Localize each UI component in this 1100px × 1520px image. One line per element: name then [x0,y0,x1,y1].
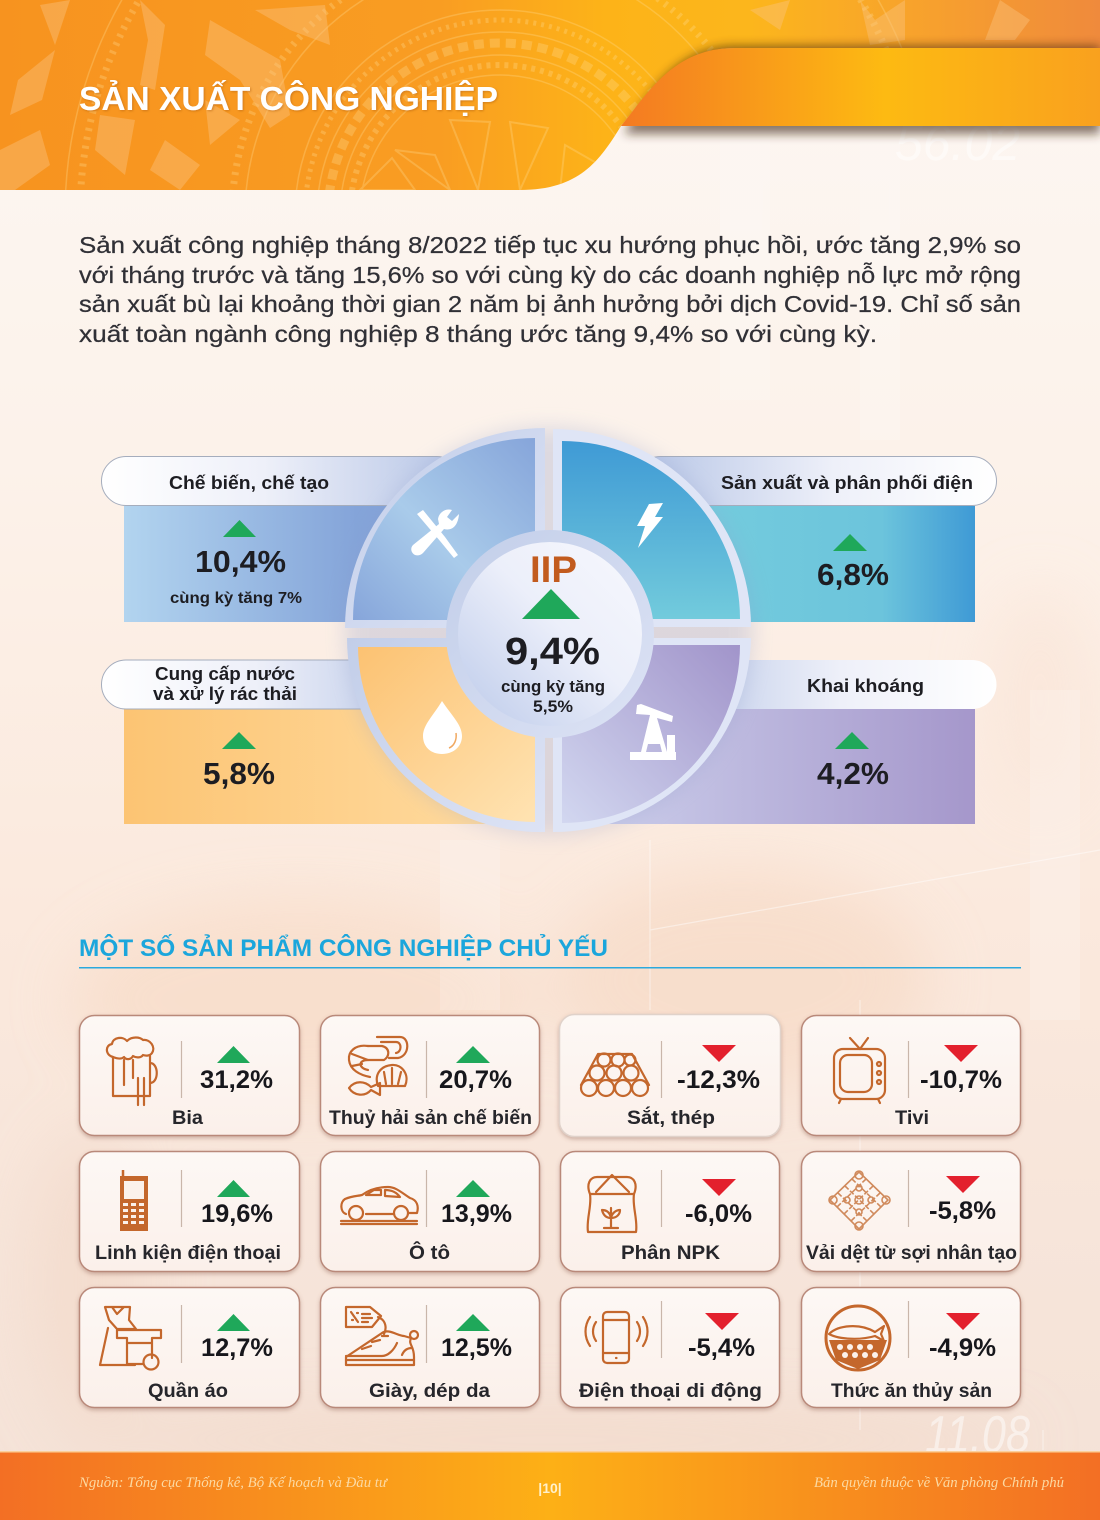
panel: Cung cấp nước và xử lý rác thải: 5,8% [203,756,275,791]
panel: Chế biến, chế tạo: 10,4% [195,544,286,579]
card: Tivi: -10,7% [920,1066,1002,1094]
panel: Chế biến, chế tạo: cùng kỳ tăng 7% [170,590,302,607]
icon: water drop [423,701,462,754]
panel: Cung cấp nước và xử lý rác thải: và xử lý rác thải [153,683,297,704]
icon: clothes [100,1307,161,1370]
card: Phân NPK: -6,0% [685,1200,752,1228]
icon: vibrating smartphone [586,1312,648,1363]
card: Điện thoại di động: Điện thoại di động [579,1380,762,1402]
card: Điện thoại di động [560,1288,780,1408]
center circle: 9,4% [505,631,600,673]
icon: woven fabric [829,1171,890,1230]
icon: steel pipes [581,1054,649,1096]
card: Ô tô: Ô tô [409,1240,450,1264]
card: Sắt, thép [560,1014,780,1136]
card: Giày, dép da: 12,5% [441,1334,512,1362]
page background: 11.08 [925,1406,1030,1464]
icon: fish feed [826,1306,890,1370]
quadrant: bottom left [347,638,545,832]
intro paragraph: sản xuất bù lại khoảng thời gian 2 năm bị ảnh hưởng bởi dịch Covid-19. Chỉ số sản [79,291,1021,317]
panel: Sản xuất và phân phối điện: 6,8% [817,557,889,592]
card: Phân NPK: Phân NPK [621,1242,720,1264]
footer source: Nguồn: Tổng cục Thống kê, Bộ Kế hoạch và Đầu tư [78,1475,389,1491]
card: Vải dệt từ sợi nhân tạo [802,1152,1020,1272]
center circle [446,530,654,738]
quadrant: top left [345,428,545,628]
header drum pattern [65,0,902,190]
icon: television [834,1038,885,1103]
card: Quần áo: Quần áo [148,1380,228,1402]
card: Thức ăn thủy sản [802,1288,1020,1408]
intro paragraph: Sản xuất công nghiệp tháng 8/2022 tiếp tục xu hướng phục hồi, ước tăng 2,9% so [79,232,1021,258]
intro paragraph: với tháng trước và tăng 15,6% so với cùng kỳ do các doanh nghiệp nỗ lực mở rộng [79,262,1021,288]
panel: Chế biến, chế tạo: Chế biến, chế tạo [169,472,329,493]
center circle: cùng kỳ tăng [501,678,605,696]
quadrant: bottom right [553,638,751,832]
card: Vải dệt từ sợi nhân tạo: -5,8% [929,1197,996,1225]
icon: lightning bolt [637,503,663,548]
panel: Chế biến, chế tạo [102,456,500,622]
card: Ô tô: 13,9% [441,1200,512,1228]
icon: car [341,1187,418,1224]
card: Bia [80,1016,300,1136]
header ribbon [621,48,1100,126]
ribbon shadow [625,46,1100,134]
card: Quần áo: 12,7% [201,1334,273,1362]
panel: Khai khoáng: Khai khoáng [807,675,924,696]
card: Sắt, thép: Sắt, thép [627,1105,715,1129]
header bird motifs [0,0,1030,190]
center circle: IIP [530,549,577,590]
card: Bia: Bia [172,1107,203,1129]
icon: beer [107,1038,157,1105]
panel: Khai khoáng: 4,2% [817,756,889,791]
section heading: MỘT SỐ SẢN PHẨM CÔNG NGHIỆP CHỦ YẾU [79,933,608,962]
footer copyright: Bản quyền thuộc về Văn phòng Chính phủ [814,1475,1064,1491]
panel: Sản xuất và phân phối điện: Sản xuất và phân phối điện [721,472,973,493]
IIP diagram [102,427,996,835]
header band [0,0,1100,190]
panel: Khai khoáng [580,660,996,824]
panel: Cung cấp nước và xử lý rác thải [102,660,524,824]
card: Quần áo [80,1288,300,1408]
icon: keypad phone [120,1170,148,1231]
panel: Sản xuất và phân phối điện [600,456,996,622]
card: Giày, dép da [320,1288,540,1408]
icon: oil pump [630,704,676,760]
card: Thức ăn thủy sản: -4,9% [929,1334,996,1362]
card: Thuỷ hải sản chế biến: Thuỷ hải sản chế biến [329,1107,532,1129]
quadrant: top right [553,429,751,627]
page background: 56.02 [895,115,1020,171]
card: Linh kiện điện thoại [80,1152,300,1272]
card: Tivi: Tivi [895,1107,929,1129]
card: Giày, dép da: Giày, dép da [369,1380,490,1402]
card: Linh kiện điện thoại: 19,6% [201,1200,273,1228]
card: Thức ăn thủy sản: Thức ăn thủy sản [831,1380,992,1402]
icon: fertilizer bag [588,1175,636,1232]
card: Linh kiện điện thoại: Linh kiện điện thoại [95,1242,281,1264]
page number: |10| [538,1480,562,1496]
icon: shoe with tag [346,1307,418,1365]
card: Ô tô [320,1152,540,1272]
icon: seafood [349,1037,407,1095]
card: Sắt, thép: -12,3% [677,1066,760,1094]
card: Vải dệt từ sợi nhân tạo: Vải dệt từ sợi nhân tạo [806,1242,1017,1264]
intro paragraph [79,232,1021,347]
card: Phân NPK [560,1152,780,1272]
footer [0,1451,1100,1520]
card: Thuỷ hải sản chế biến: 20,7% [439,1066,512,1094]
card: Tivi [802,1016,1020,1136]
card: Bia: 31,2% [200,1066,273,1094]
panel: Cung cấp nước và xử lý rác thải: Cung cấp nước [155,663,295,684]
icon: wrench and screwdriver [411,509,459,558]
card: Thuỷ hải sản chế biến [320,1016,540,1136]
intro paragraph: xuất toàn ngành công nghiệp 8 tháng ước tăng 9,4% so với cùng kỳ. [79,321,877,347]
center circle: 5,5% [533,698,573,716]
diagram shadow [345,427,753,835]
card: Điện thoại di động: -5,4% [688,1334,755,1362]
title: SẢN XUẤT CÔNG NGHIỆP [79,79,498,117]
